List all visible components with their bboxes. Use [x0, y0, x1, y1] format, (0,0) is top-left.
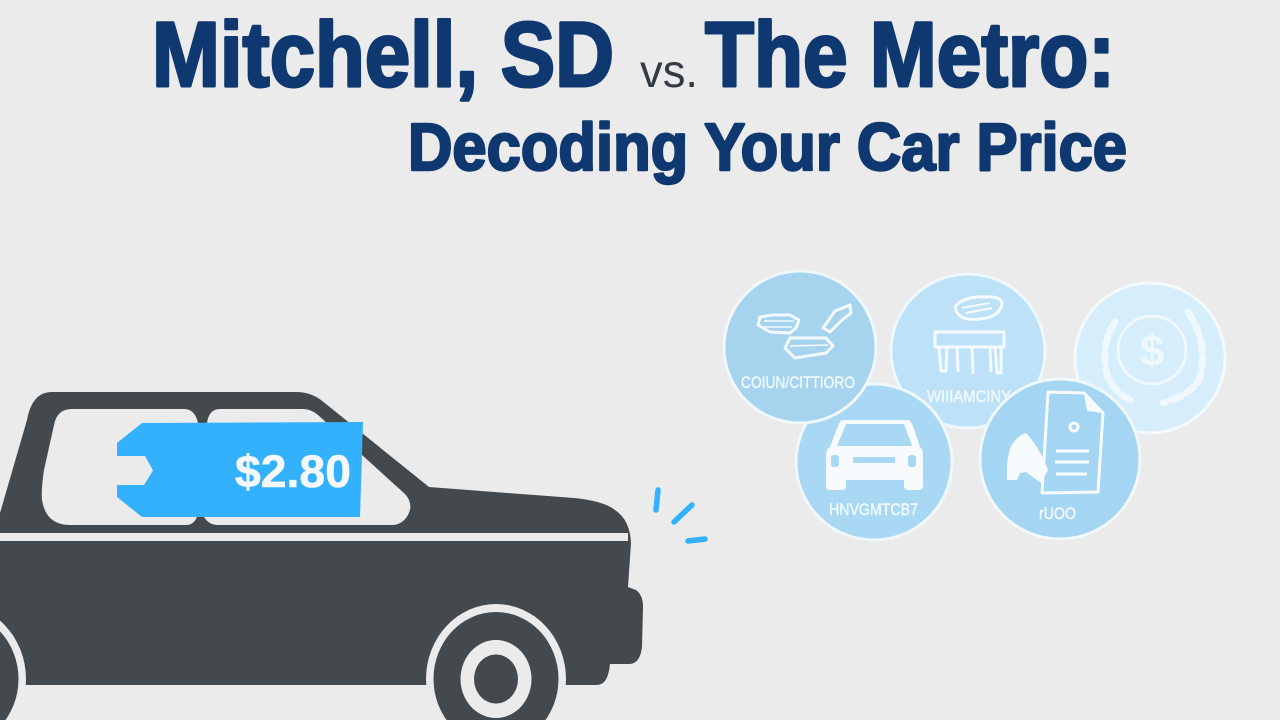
icon: spark lines — [656, 490, 705, 541]
price text: $2.80 — [235, 446, 351, 497]
title — [152, 4, 1127, 185]
icon: car front — [826, 420, 923, 490]
icon: car silhouette — [0, 392, 643, 720]
circle: warranty — [891, 274, 1045, 428]
label: COIUN/CITTIORO — [741, 373, 855, 392]
icon: dollar coin — [1105, 312, 1203, 403]
front wheel — [426, 604, 566, 720]
label: rUOO — [1039, 504, 1076, 523]
label: HNVGMTCB7 — [829, 500, 918, 519]
right window — [204, 409, 410, 525]
subheading: Decoding Your Car Price — [408, 110, 1127, 185]
label: WIIIAMCINY — [927, 387, 1011, 406]
icon: parts — [758, 305, 851, 358]
rear wheel — [0, 604, 26, 720]
icon: hand — [1007, 433, 1048, 483]
dollar sign: $ — [1140, 327, 1164, 376]
circle: financing dollar — [1075, 283, 1225, 433]
price tag — [117, 422, 363, 517]
car body — [0, 392, 643, 685]
circle: fees document — [980, 379, 1140, 539]
icon: part — [935, 297, 1004, 374]
heading: Mitchell, SD: Mitchell, SD — [152, 4, 614, 106]
belt line — [0, 533, 628, 541]
circle: vehicle — [796, 384, 952, 540]
left window — [42, 409, 198, 525]
heading: The Metro: The Metro: — [705, 4, 1115, 106]
circle: condition — [724, 271, 876, 423]
icon: document — [1042, 392, 1103, 493]
heading: vs.: vs. — [640, 45, 698, 97]
